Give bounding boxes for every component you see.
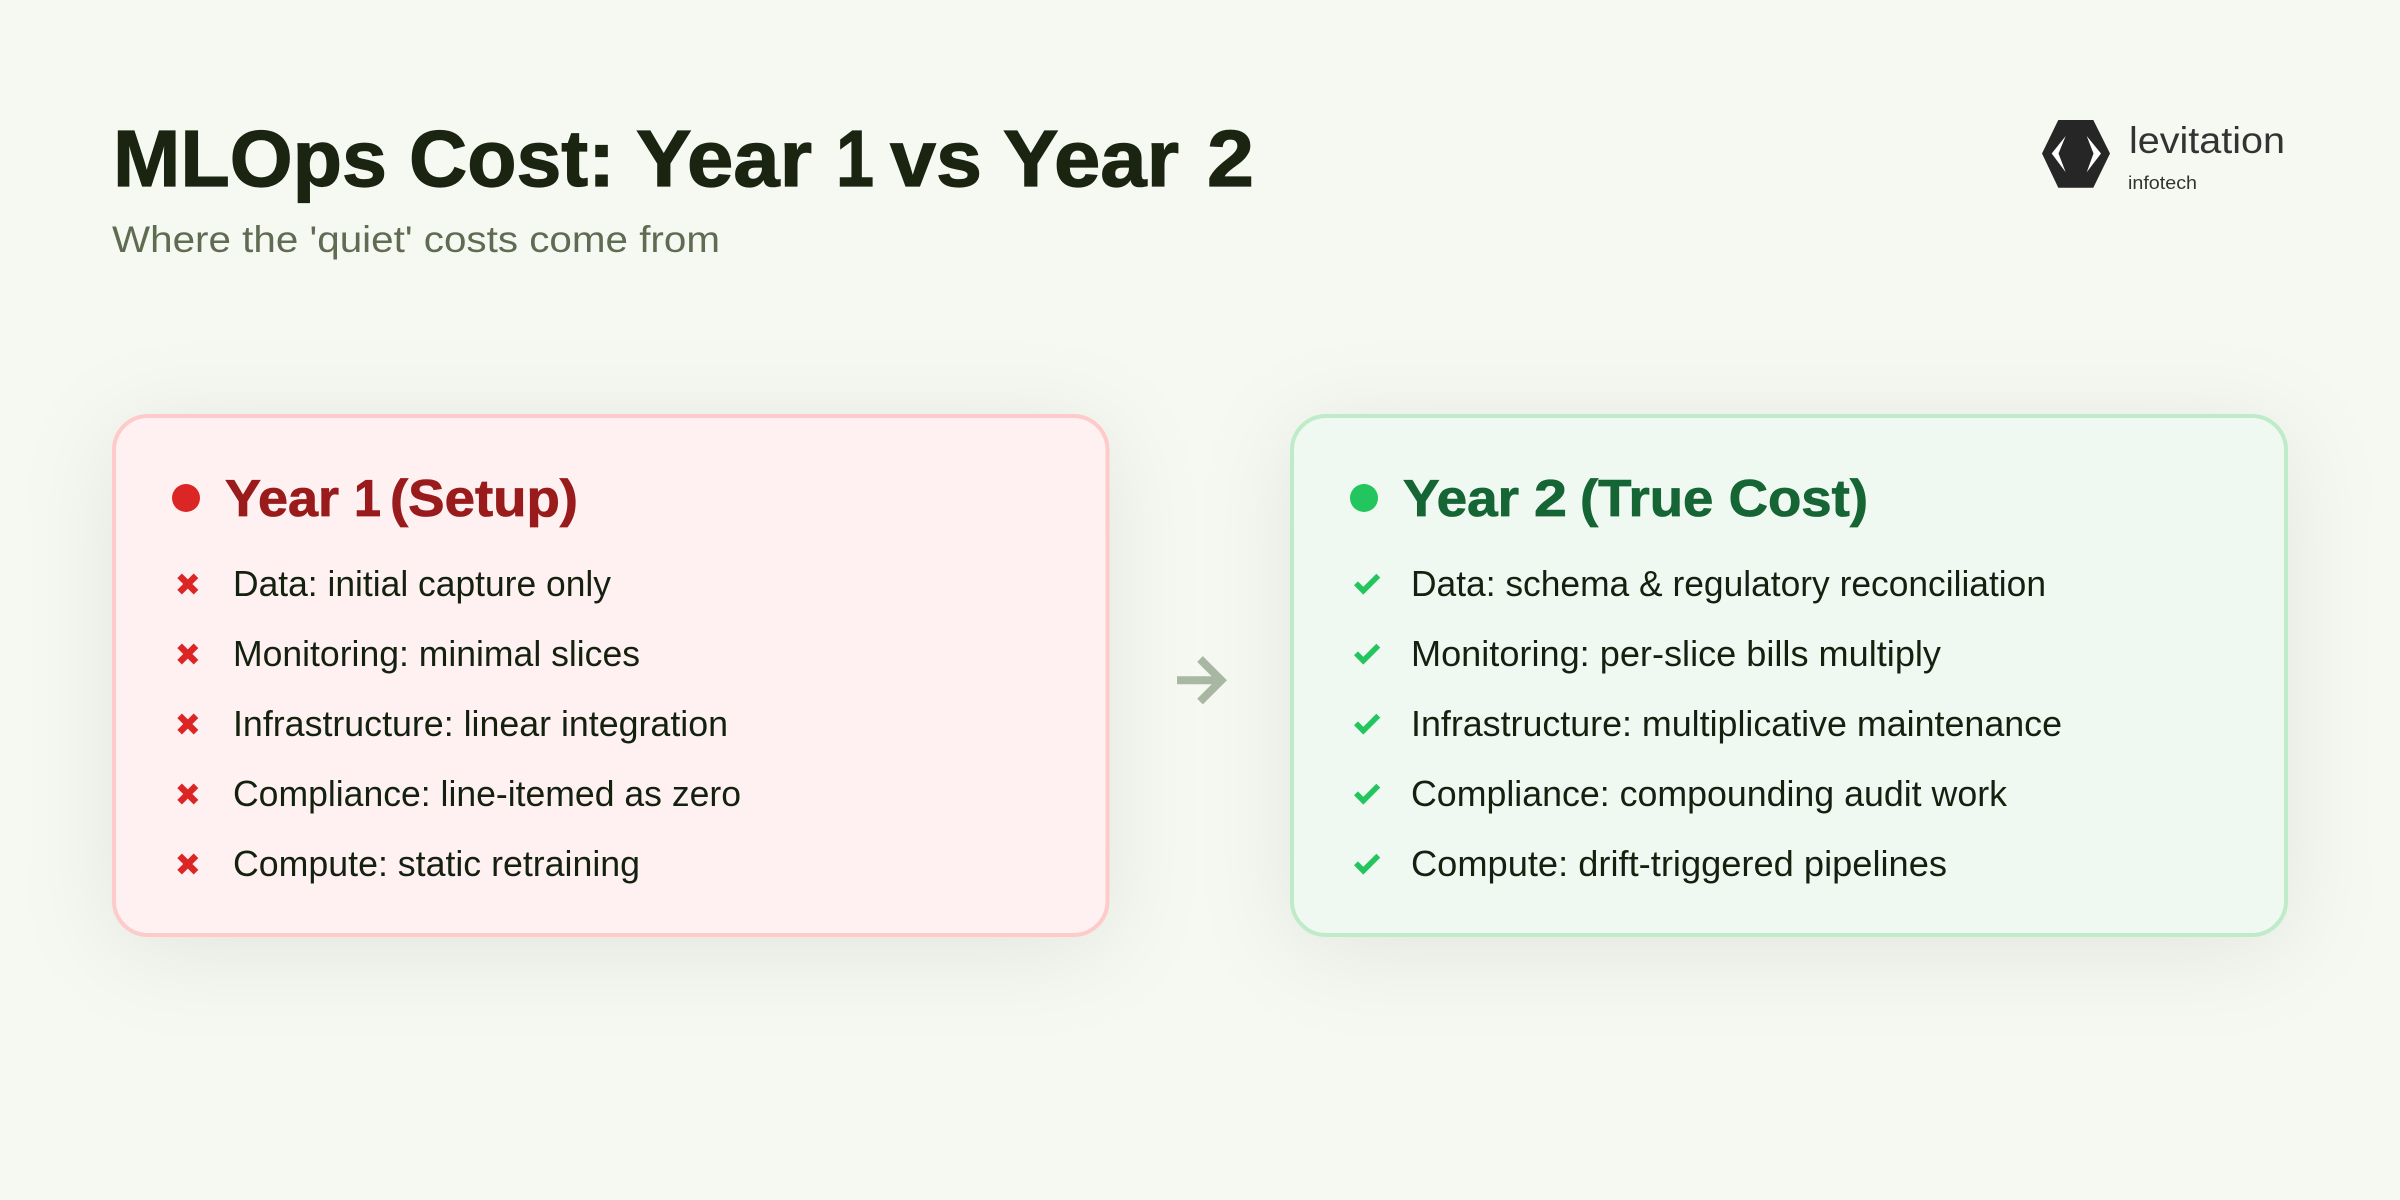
heading: Year 1 (Setup): 1	[354, 470, 381, 528]
heading: Year 1 (Setup)	[225, 470, 578, 528]
item: data: Data: initial capture only	[233, 563, 611, 604]
item: data: Data: schema & regulatory reconciliation	[1411, 563, 2046, 604]
title: Cost:	[409, 114, 615, 203]
title: 1	[836, 114, 874, 203]
arrow	[1177, 659, 1222, 702]
item: compute: Compute: static retraining	[233, 843, 640, 884]
heading: Year 2 (True Cost): 2	[1534, 470, 1567, 528]
panel: Year 1 (Setup)	[114, 416, 1108, 935]
item: compliance: Compliance: compounding audit work	[1411, 773, 2008, 814]
list: Year 2 items	[1356, 563, 2062, 884]
logo tagline: infotech	[2128, 173, 2197, 193]
title: Year	[1003, 114, 1179, 203]
status dot: green	[1350, 484, 1378, 512]
item: infrastructure: Infrastructure: multiplicative maintenance	[1411, 703, 2062, 744]
heading: Year 1 (Setup): Year	[225, 470, 339, 528]
subtitle: Where the 'quiet' costs come from	[112, 219, 720, 260]
panel: Year 2 (True Cost)	[1292, 416, 2286, 935]
logo: levitation infotech	[2042, 120, 2285, 193]
status dot: red	[172, 484, 200, 512]
item: monitoring: Monitoring: minimal slices	[233, 633, 640, 674]
heading: Year 2 (True Cost): (True Cost)	[1580, 470, 1868, 528]
title	[113, 114, 1254, 203]
heading: Year 2 (True Cost): Year	[1403, 470, 1519, 528]
logo wordmark: levitation	[2129, 120, 2285, 161]
title: vs	[890, 114, 982, 203]
title: Year	[636, 114, 812, 203]
heading: Year 1 (Setup): (Setup)	[390, 470, 578, 528]
icon: hexagon with chevrons	[2042, 120, 2110, 188]
heading: Year 2 (True Cost)	[1403, 470, 1868, 528]
item: compliance: Compliance: line-itemed as zero	[233, 773, 741, 814]
item: compute: Compute: drift-triggered pipelines	[1411, 843, 1947, 884]
list: Year 1 items	[180, 563, 741, 884]
title: MLOps	[113, 114, 387, 203]
item: monitoring: Monitoring: per-slice bills multiply	[1411, 633, 1941, 674]
title: 2	[1207, 114, 1254, 203]
item: infrastructure: Infrastructure: linear integration	[233, 703, 728, 744]
